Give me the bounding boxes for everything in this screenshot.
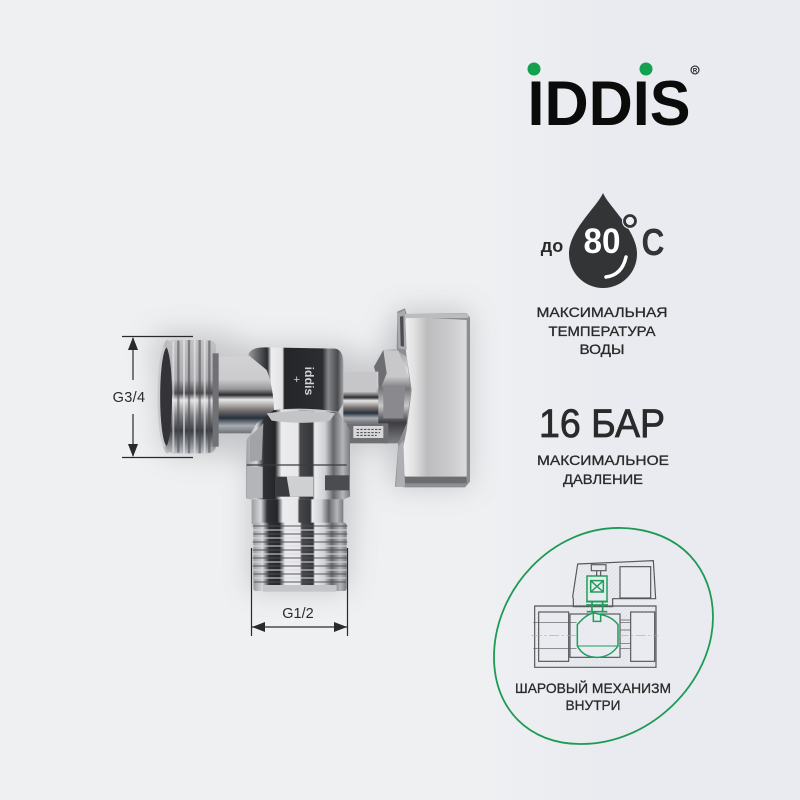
small tab with marking: [347, 423, 388, 443]
text: max temperature: МАКСИМАЛЬНАЯ: [536, 304, 668, 320]
upper body with brand mark: iddis: [302, 367, 316, 396]
handle hub: [374, 349, 411, 443]
dimension: G3/4: [113, 336, 193, 458]
lower thread: [253, 523, 347, 592]
heading: 16 bar: 16 БАР: [539, 402, 665, 446]
green oval outline: [494, 528, 713, 744]
text: ball mechanism inside: ВНУТРИ: [566, 697, 620, 713]
text: max pressure: ДАВЛЕНИЕ: [563, 471, 643, 487]
logo: IDDIS: R: [693, 68, 698, 74]
icon: temperature drop 80 °C: 80: [584, 222, 620, 261]
icon: temperature drop 80 °C: C: [642, 222, 664, 264]
icon: temperature drop 80 °C: [541, 193, 664, 288]
text: max pressure: [537, 452, 669, 487]
neck: [252, 499, 343, 524]
dimension: G1/2: [252, 548, 348, 636]
icon: temperature drop 80 °C: до: [541, 236, 563, 256]
text: max temperature: [536, 304, 668, 357]
cross-section diagram: [532, 561, 658, 667]
upper body with brand mark: +: [293, 374, 300, 386]
logo: IDDIS: IDDIS: [528, 69, 690, 139]
text: ball mechanism inside: ШАРОВЫЙ МЕХАНИЗМ: [515, 679, 671, 696]
text: max pressure: МАКСИМАЛЬНОЕ: [537, 452, 669, 468]
dimension: G1/2: G1/2: [282, 606, 314, 622]
dimension: G3/4: G3/4: [113, 390, 145, 406]
product photo: chrome valve: [153, 308, 470, 592]
left pipe: [217, 357, 280, 433]
green ball and stem: [577, 576, 618, 657]
callout: ball mechanism: [494, 528, 713, 744]
left thread: [159, 340, 219, 453]
text: max temperature: ВОДЫ: [580, 341, 624, 357]
right stem: [343, 372, 378, 423]
text: max temperature: ТЕМПЕРАТУРА: [548, 323, 656, 339]
lower body: [246, 410, 350, 499]
shadow: [153, 310, 470, 590]
handle plate: [395, 308, 470, 487]
upper body with brand mark: [248, 347, 343, 412]
text: ball mechanism inside: [515, 679, 671, 713]
